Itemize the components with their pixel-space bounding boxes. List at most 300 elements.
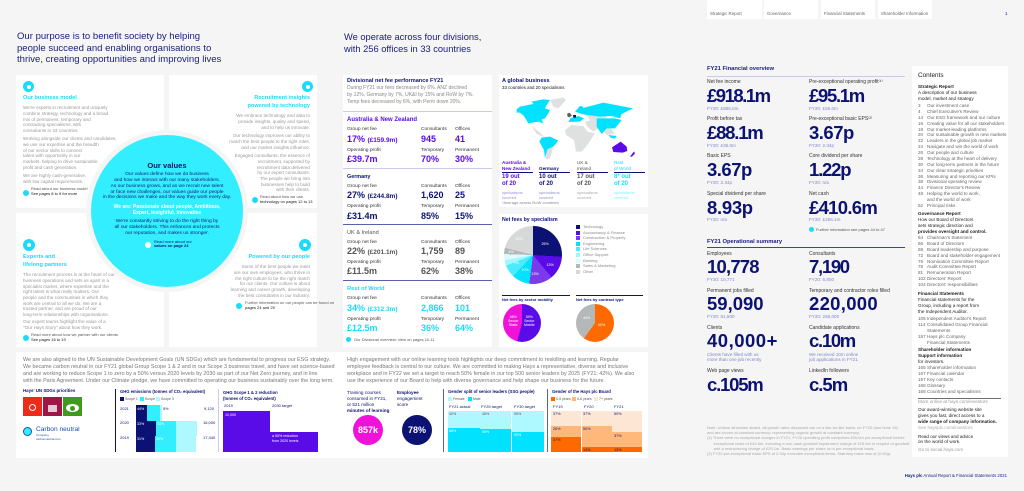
block: shareholder information	[918, 347, 1006, 395]
stat: clients: Clients	[707, 325, 722, 331]
pie chart: net fees by sector mobility: Net fees by sector mobility	[502, 296, 553, 302]
chart: GHG emissions: 36%	[156, 437, 163, 441]
block: governance report	[918, 211, 1006, 289]
text: recruitment insights intro: provide insights, quality and speed,	[238, 119, 310, 124]
section: UK &amp; Ireland: 89	[455, 246, 465, 256]
block: shareholder information: 165	[918, 365, 926, 370]
stat: net cash: FY20: £256.1m	[809, 217, 840, 222]
chart: GHG emissions: 2019	[120, 435, 129, 440]
text: training stat: minutes of learning	[347, 408, 389, 412]
pie chart: specialism: 13%	[532, 272, 539, 276]
block: financial statements: Financial Statements	[927, 340, 970, 344]
pie chart: net fees by sector mobility: Static	[509, 323, 518, 327]
stat: Australia &amp; New Zealand: 19 out	[502, 174, 520, 180]
block: strategic report: 38	[918, 179, 923, 184]
text: recruitment insights intro: We embrace technology and data to	[236, 113, 310, 118]
pie chart: net fees by sector mobility: Sector	[508, 319, 518, 323]
text: experts intro: people and the communities in which they	[23, 295, 108, 300]
link: recruitment insights: technology on pages 12 to 13	[260, 199, 312, 204]
section: Rest of World: Offices	[455, 296, 470, 301]
pie chart: specialism	[504, 226, 562, 284]
section: Australia &amp; New Zealand: 41	[455, 134, 465, 144]
text: recruitment insights engagement: recruitment data delivered	[257, 165, 310, 170]
stat: Australia &amp; New Zealand: New Zealand	[502, 166, 530, 171]
pie chart: specialism: 21%	[516, 237, 523, 241]
section: UK &amp; Ireland: 38%	[455, 266, 473, 276]
block: strategic report: 24	[918, 144, 923, 149]
stat: Germany: Germany	[539, 166, 559, 170]
stat: Australia &amp; New Zealand: specialisms	[502, 190, 523, 194]
block: shareholder information: 168	[918, 388, 926, 394]
pie chart: net fees by contract type	[576, 295, 643, 344]
heading: net fees by specialism: Net fees by specialism	[502, 216, 558, 222]
nav tab: Shareholder Information: Shareholder Information	[881, 11, 928, 16]
text: recruitment insights engagement: The people we bring into	[260, 176, 310, 181]
block: strategic report: 44	[918, 185, 923, 190]
heading: financial overview: FY21 Financial overview	[707, 66, 774, 72]
text: right thing: We're constantly striving to do the right thing by	[116, 219, 218, 224]
nav tab: Financial Statements: Financial Statements	[824, 11, 865, 16]
text: training stat: Training courses	[347, 390, 381, 394]
heading: contents: Contents	[918, 72, 944, 79]
page number: 1	[1005, 11, 1007, 16]
panel: divisional net fee performance	[343, 75, 492, 347]
stat: core dividend per share: 1.22p	[809, 159, 850, 180]
nav tab: Strategic Report: Strategic Report	[710, 11, 742, 16]
pie chart: specialism: 10%	[522, 268, 529, 272]
text: we are	[114, 204, 220, 216]
chart: GHG reduction target	[218, 389, 319, 452]
block: strategic report: Divisional operating review	[927, 179, 982, 184]
note: financial	[809, 227, 869, 233]
text: sustainable development goals: with the Paris Agreement. Under our Climate pledge, we have committed to operating our business sustainably over the long term.	[23, 378, 334, 384]
stat: LinkedIn followers: LinkedIn followers	[809, 368, 849, 374]
chart: GHG emissions: Scope 1	[125, 397, 138, 401]
chart: GHG emissions: 17,340	[203, 435, 215, 440]
block: strategic report: Strategic Report	[918, 84, 954, 89]
section: Australia &amp; New Zealand: Offices	[455, 127, 470, 132]
note: divisional: Our Divisional overview: view on pages 10-11	[354, 336, 435, 342]
heading: experts: lifelong partners	[23, 262, 67, 268]
block: shareholder information: Support information	[918, 353, 962, 358]
block: shareholder information: Shareholder information	[918, 347, 971, 352]
chart: GHG emissions: 33%	[137, 422, 144, 426]
section: Germany: 15%	[455, 211, 473, 221]
section: Australia &amp; New Zealand: Consultants	[421, 127, 447, 132]
section: Germany: Group net fee	[347, 184, 377, 189]
text: right thing	[114, 218, 220, 236]
section: Rest of World: 64%	[455, 323, 473, 333]
link: business model	[23, 186, 88, 196]
text: values body: and how we interact with our many stakeholders.	[114, 178, 220, 183]
text: values body: Our values define how we do business	[125, 172, 209, 177]
stat: basic EPS: Basic EPS	[707, 153, 731, 159]
text: business model intro: combine strategy, technology and a broad	[23, 111, 108, 116]
stat: net fee income	[707, 79, 770, 111]
section: Germany: Consultants	[421, 184, 447, 189]
section: Australia &amp; New Zealand: 30%	[455, 154, 473, 164]
pie chart: net fees by sector mobility: Sector	[524, 319, 534, 323]
block: financial statements: Hays plc Company	[927, 334, 966, 339]
section: Germany: 1,620	[421, 190, 444, 200]
block: governance report: 104	[918, 282, 926, 287]
section: operational summary	[707, 238, 905, 403]
block: governance report: Governance Report	[918, 211, 961, 216]
logo: carbon neutral	[23, 426, 80, 440]
link: experts: Read more about how we partner with our clients	[31, 332, 118, 337]
chart: GHG emissions: 9,120	[204, 406, 214, 411]
text: recruitment insights intro	[236, 113, 310, 130]
block: governance report: Board leadership and purpose	[927, 247, 989, 252]
block: shareholder information: Countries and specialisms	[927, 388, 981, 394]
block: governance report: How our Board of Directors	[918, 217, 973, 222]
section: Germany: Operating profit	[347, 204, 381, 209]
note: global business: *Average across RoW countries	[502, 200, 559, 204]
stat: Rest of World: specialisms	[614, 190, 635, 194]
footer: report title: Hays plc Annual Report & Financial Statements 2021	[905, 473, 1007, 478]
stat: net fee income: £918.1m	[707, 85, 770, 106]
text: footnotes: exceptional costs of £44.6m, including a non-cash goodwill impairment charge of £15.5m in respect of goodwill	[714, 441, 909, 446]
section: UK &amp; Ireland	[343, 224, 492, 281]
stat: net cash	[809, 191, 899, 224]
text: our people	[230, 264, 310, 298]
link: business model: See pages 8 to 9 for more	[31, 191, 77, 196]
pie chart: net fees by contract type: Net fees by contract type	[576, 296, 624, 302]
block: shareholder information: Key contacts	[927, 377, 953, 382]
icon: SDG 8	[43, 397, 62, 416]
text: footnotes: (2) FY20 pre-exceptional basic EPS of 2.34p excludes exceptional items. Statutory basic loss of (0.59)p.	[707, 451, 891, 456]
panel: powered by our people	[169, 213, 317, 347]
stat: Rest of World: 8* out	[614, 174, 631, 180]
text: recruitment insights engagement: Engaged consultants, the essence of	[235, 153, 310, 158]
chart: GHG reduction target: 2019	[224, 403, 233, 408]
stat: Germany	[539, 166, 570, 200]
stat: web page views: Web page views	[707, 368, 744, 374]
text: business model close	[23, 173, 86, 184]
link: our people: Further information on our people can be found on	[245, 300, 334, 305]
chart: gender of leaders: 55%	[482, 430, 489, 434]
pie chart: net fees by sector mobility: Mobile	[524, 323, 535, 327]
text: engagement: use the experience of our Board to help with diverse governance and help shape our business for the future.	[347, 378, 605, 384]
chart: gender of leaders: FY30 target	[514, 404, 535, 409]
badge: 857k: 857k	[358, 425, 378, 435]
nav tab: Governance: Governance	[767, 11, 791, 16]
block: strategic report: and the world of work	[927, 197, 971, 202]
text: engagement: High engagement with our online learning tools highlights our deep commitment to reskilling and learning. Regular	[347, 356, 619, 362]
logo: carbon neutral: carbonneutral.com	[36, 436, 61, 440]
block: strategic report: Our market-leading platforms	[927, 126, 986, 132]
icon: business model	[23, 81, 34, 92]
legend: specialism: Technology	[583, 224, 603, 229]
stat: consultants: FY20: 6,800	[809, 277, 834, 282]
block: strategic report: Our people and culture	[927, 150, 974, 155]
stat: LinkedIn followers	[809, 368, 899, 396]
icon: recruitment insights	[302, 81, 313, 92]
text: our people: Some of the best people we meet	[242, 264, 310, 269]
heading: purpose: people succeed and enabling organisations to	[17, 43, 211, 54]
block: strategic report: Our ESG framework and our culture	[927, 115, 1000, 120]
section: Germany: Temporary	[421, 204, 444, 209]
chart: GHG emissions: 2020	[120, 420, 129, 425]
chart: gender pay gap: 37%	[553, 412, 561, 416]
text: business model intro: consultants in 33 countries.	[23, 128, 79, 133]
stat: permanent jobs filled: Permanent jobs filled	[707, 288, 754, 294]
block: strategic report: Our sustainable growth in new markets	[927, 132, 1006, 137]
section: Australia &amp; New Zealand: Permanent	[455, 148, 479, 153]
stat: Australia &amp; New Zealand: of 20	[502, 181, 516, 187]
chart: GHG emissions: 2021	[120, 406, 129, 411]
legend: specialism	[576, 224, 626, 274]
stat: special dividend per share: Special dividend per share	[707, 191, 766, 197]
block: governance report: 75	[918, 258, 923, 264]
block: governance report: Remuneration Report	[927, 270, 971, 275]
block: strategic report: Helping the world to work,	[927, 191, 980, 196]
stat: net fee income: FY20: £886.0m	[707, 106, 738, 111]
section: Rest of World: Group net fee	[347, 296, 377, 301]
nav tab: Financial Statements	[821, 0, 875, 19]
legend: specialism: Accountancy & Finance	[583, 230, 625, 235]
stat: core dividend per share: Core dividend per share	[809, 153, 862, 159]
block: financial statements: the Independent Auditor.	[918, 309, 968, 314]
stat: profit before tax	[707, 116, 763, 148]
chart: gender of leaders: Gender split of senior leaders (SSG people)	[448, 388, 535, 394]
chart: gender pay gap: FY20	[584, 404, 594, 409]
block: shareholder information: Glossary	[927, 383, 945, 388]
text: footnotes: Note: Unless otherwise stated, all growth rates discussed are on a like-for-like basis, on FY20 (see Note 19)	[707, 425, 898, 430]
note: financial: Further information see pages 44 to 47	[816, 226, 885, 232]
block: strategic report: Technology at the heart of delivery	[927, 156, 997, 161]
text: business model close: with low capital requirements.	[23, 179, 83, 184]
section: Australia &amp; New Zealand: 17% (£159.9m)	[347, 134, 398, 144]
block: strategic report: Our investment case	[927, 103, 969, 108]
stat: pre-exceptional basic EPS: FY20: 2.34p	[809, 143, 834, 148]
stat: special dividend per share	[707, 191, 797, 224]
section: UK &amp; Ireland: £11.5m	[347, 266, 377, 276]
pie chart: specialism: 13%	[546, 263, 554, 267]
stat: net cash: Net cash	[809, 191, 829, 197]
block: strategic report: 16	[918, 121, 923, 126]
link: our people	[236, 300, 334, 310]
stat: basic EPS: FY20: 2.34p	[707, 180, 732, 185]
block: shareholder information: Shareholder information	[927, 365, 976, 370]
block: strategic report	[918, 84, 1006, 209]
heading: recruitment insights: powered by technology	[248, 103, 310, 109]
text: values body	[103, 172, 231, 200]
chart: gender pay gap: 0-5 years	[556, 397, 571, 401]
link: values: Read more about our	[154, 239, 192, 244]
stat: UK &amp; Ireland: UK &	[577, 160, 588, 165]
chart: gender pay gap: 37%	[553, 438, 561, 442]
section: Australia &amp; New Zealand: 945	[421, 134, 436, 144]
chart: gender of leaders	[443, 389, 546, 452]
block: governance report: Directors' responsibilities	[927, 282, 978, 287]
section: Rest of World: Consultants	[421, 296, 447, 301]
stat: pre-exceptional operating profit: Pre-exceptional operating profit⁽¹⁾	[809, 79, 883, 85]
block: strategic report: Principal risks	[927, 203, 955, 208]
stat: pre-exceptional basic EPS: 3.67p	[809, 122, 854, 143]
heading: our values: Our values	[147, 161, 187, 170]
badge: 78%: 78%	[408, 425, 426, 435]
stat: permanent jobs filled: FY20: 51,500	[707, 314, 735, 319]
stat: clients: Clients have filled with us	[707, 352, 759, 356]
text: engagement stat: engagement	[397, 396, 423, 400]
text: sustainable development goals: We are also aligned to the UN Sustainable Development Goals (UN SDGs) which are fundamental to progress our ESG strategy.	[23, 356, 330, 362]
heading: recruitment insights	[248, 95, 310, 109]
text: experts intro: right talent is what really matters. Our	[23, 289, 99, 294]
panel: bottom ESG	[16, 352, 648, 458]
stat: employees: Employees	[707, 251, 732, 257]
stat: clients: more than one job recently	[707, 357, 761, 362]
stat: Rest of World: Rest	[614, 160, 623, 165]
section: Rest of World: £12.5m	[347, 323, 378, 333]
section: Australia &amp; New Zealand: Group net fee	[347, 127, 377, 132]
text: business model detail	[23, 136, 117, 170]
badge: 857k	[353, 415, 383, 445]
nav tab: Governance	[764, 0, 818, 19]
stat: employees	[707, 251, 797, 284]
text: recruitment insights technology: match the best people to the right roles,	[229, 139, 310, 144]
block: strategic report: 52	[918, 203, 923, 208]
text: our people: are our own employees, who thrive in	[234, 270, 310, 275]
logo: carbon neutral: Carbon neutral	[36, 426, 80, 433]
panel: a global business	[499, 75, 648, 207]
text: we are: Expert, Insightful, Innovative	[133, 210, 201, 216]
pie chart: net fees by sector mobility: 46%	[510, 315, 517, 319]
link: business model: Read about our business model	[31, 186, 87, 191]
stat: basic EPS	[707, 153, 797, 186]
stat: UK &amp; Ireland: 17 out	[577, 174, 595, 180]
stat: basic EPS: 3.67p	[707, 159, 752, 180]
block: strategic report: Our clear strategic priorities	[927, 168, 983, 173]
icon: SDG 13	[63, 397, 82, 416]
stat: UK &amp; Ireland: covered	[577, 195, 591, 200]
block: governance report: sets strategic direction and	[918, 223, 973, 228]
heading: recruitment insights: Recruitment insights	[254, 95, 310, 101]
heading: experts	[23, 254, 67, 268]
stat: clients	[707, 325, 797, 363]
chart: GHG reduction target: (tonnes of CO₂ equivalent)	[223, 396, 276, 400]
text: engagement: employee feedback is central to our culture. We are committed to making Hays a representative, diverse and inclusive	[347, 364, 628, 370]
text: divisional intro: Temp fees decreased by 6%, with Perm down 20%.	[347, 99, 461, 105]
block: governance report: Board and stakeholder engagement	[927, 253, 1000, 258]
block: shareholder information: Financial calendar	[927, 371, 964, 376]
section: Rest of World: Temporary	[421, 317, 444, 322]
stat: UK &amp; Ireland	[577, 160, 608, 200]
circle: our values	[86, 130, 248, 292]
link: values: values on page 24	[154, 243, 188, 248]
text: our people: the right culture to be the right match	[235, 276, 310, 281]
section: Germany	[343, 168, 492, 225]
section: UK &amp; Ireland: Offices	[455, 240, 470, 245]
section: UK &amp; Ireland: Consultants	[421, 240, 447, 245]
text: recruitment insights engagement: recruitment, supported by	[258, 159, 310, 164]
text: our people: the best consultants in our industry.	[238, 293, 310, 298]
text: footnotes: and a restructuring charge of £29.1m. Basic earnings per share on a pre-exceptional basis.	[714, 446, 875, 451]
block: shareholder information: 167	[918, 377, 926, 382]
stat: Germany: covered	[539, 195, 553, 200]
chart: GHG emissions: 33%	[157, 422, 164, 426]
stat: web page views	[707, 368, 797, 396]
heading: business model: Our business model	[23, 95, 77, 101]
stat: Australia &amp; New Zealand: covered	[502, 195, 516, 200]
legend: specialism: Sales & Marketing	[583, 263, 615, 268]
text: recruitment insights technology: and our market insights influence.	[241, 145, 310, 150]
stat: net fee income: Net fee income	[707, 79, 741, 85]
icon: our people	[299, 239, 311, 251]
panel: net fees by specialism	[499, 214, 648, 347]
stat: profit before tax: £88.1m	[707, 122, 763, 143]
block: more online: Go to social.hays.com	[918, 446, 963, 452]
stat: temporary and contractor roles filled	[809, 288, 899, 321]
stat: Australia &amp; New Zealand: Australia &	[502, 160, 526, 165]
section: Australia &amp; New Zealand: Temporary	[421, 148, 444, 153]
stat: LinkedIn followers: c.5m	[809, 374, 847, 394]
text: right thing: all our stakeholders. This enhances and protects	[114, 225, 220, 230]
nav tab: Shareholder Information	[878, 0, 932, 19]
pie chart: specialism: 3%	[510, 255, 516, 259]
text: business model detail: of our sector skills to connect	[23, 148, 82, 153]
heading: our people: Powered by our people	[248, 254, 310, 260]
text: engagement	[347, 356, 634, 384]
stat: employees: FY20: 10,771	[707, 277, 735, 282]
text: experts intro: The recruitment process is at the heart of our	[23, 272, 115, 277]
stat: pre-exceptional basic EPS	[809, 116, 872, 148]
stat: Germany: specialisms	[539, 190, 560, 194]
legend: specialism: Office Support	[583, 252, 608, 257]
block: financial statements: 114	[918, 322, 925, 327]
block: financial statements: Financial Statements	[918, 291, 964, 296]
block: strategic report: A description of our business	[918, 90, 977, 95]
link: recruitment insights	[252, 194, 312, 204]
block: strategic report: 3	[918, 103, 921, 108]
block: strategic report: 22	[918, 138, 923, 143]
text: recruitment insights engagement: businesses help to build	[261, 182, 310, 187]
text: sustainable development goals	[23, 356, 335, 384]
text: training stat	[347, 390, 390, 413]
stat: temporary and contractor roles filled: Temporary and contractor roles filled	[809, 288, 890, 294]
chart: gender of leaders: 50%	[514, 412, 521, 416]
block: strategic report: Chief Executive's Review	[927, 109, 978, 114]
chart: gender pay gap: 50%	[614, 412, 622, 416]
text: engagement stat: score	[397, 402, 408, 406]
text: divisional intro: by 12%, Germany by 7%, UK&I by 15% and RoW by 7%.	[347, 92, 474, 98]
icon: experts	[23, 239, 35, 251]
stat: permanent jobs filled	[707, 288, 797, 321]
link: values	[145, 239, 192, 248]
pie chart: specialism: 7%	[514, 261, 519, 265]
text: engagement stat: Employee	[397, 390, 419, 394]
text: business model detail: we use our expertise and the breadth	[23, 142, 99, 147]
stat: permanent jobs filled: 59,090	[707, 293, 764, 314]
section: Rest of World: 2,866	[421, 303, 444, 313]
block: financial statements: Financial statements for the	[918, 297, 974, 302]
block: strategic report: Leaders in the global job market	[927, 138, 992, 143]
legend: specialism: Engineering	[583, 241, 604, 246]
chart: GHG reduction target: 2030 target	[272, 403, 292, 408]
text: experts intro: business operations and sets us apart in a	[23, 278, 109, 283]
text: business model intro	[23, 105, 108, 133]
section: Rest of World: 36%	[421, 323, 439, 333]
section: Australia &amp; New Zealand	[343, 111, 492, 170]
block: shareholder information: 168	[918, 383, 926, 388]
stat: special dividend per share: 8.93p	[707, 197, 753, 218]
stat: pre-exceptional operating profit	[809, 79, 883, 111]
section: Rest of World	[343, 280, 492, 339]
section: Rest of World: 34% (£312.3m)	[347, 303, 398, 313]
text: experts close: "Our Hays Story" about how they work.	[23, 325, 102, 330]
text: recruitment insights engagement	[235, 153, 310, 192]
stat: candidate applications: job applications in FY21	[809, 357, 858, 362]
